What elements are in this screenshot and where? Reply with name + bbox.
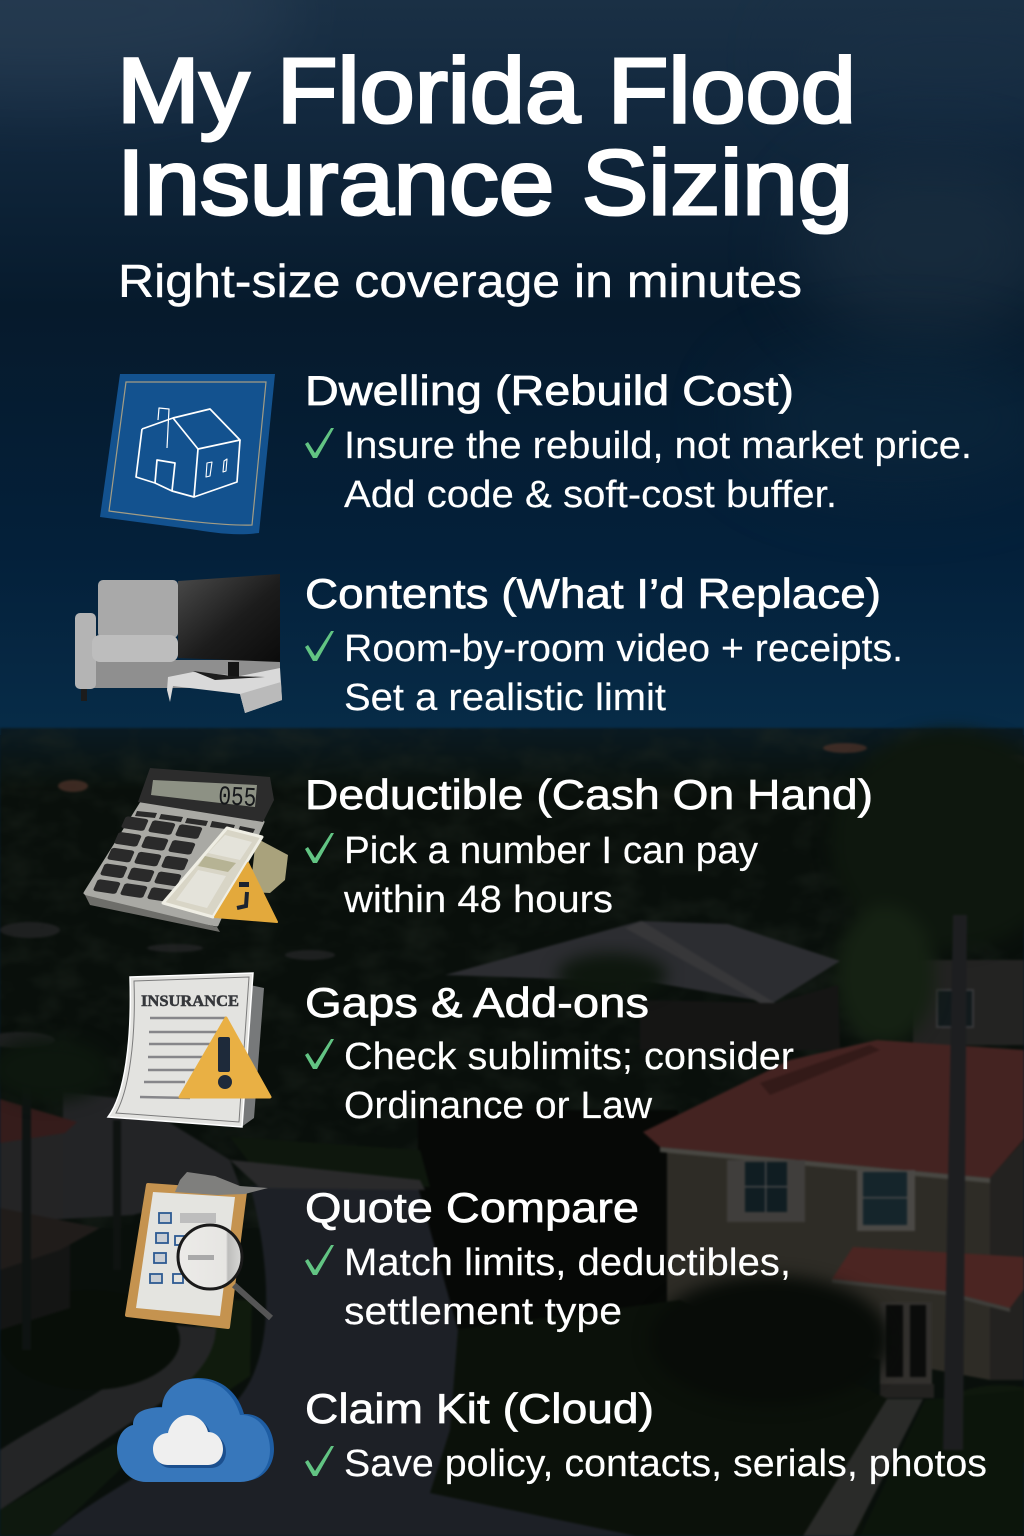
body text: within 48 hours [343,879,613,921]
windows [727,1160,805,1222]
walkway [803,1399,923,1536]
door [880,1302,932,1386]
icon: calculator, cash and warning [85,768,288,932]
body text: Pick a number I can pay [344,830,758,872]
icon: insurance document with warning: INSURANCE [141,993,239,1010]
body text: Insure the rebuild, not market price. [344,425,972,467]
background: stormy sky [0,0,1024,735]
icon: insurance document with warning [108,973,270,1128]
body text: settlement type [344,1291,622,1333]
title: My Florida Flood [117,40,856,142]
heading: Quote Compare [305,1184,639,1231]
grey roof house [640,985,840,1050]
palms [943,915,967,1450]
grey drive [63,1092,240,1219]
icon: check [305,1446,334,1476]
title [117,40,856,234]
icon: check [305,1039,334,1069]
dark hedge [418,1110,678,1340]
main red roof [643,1040,1024,1178]
icon: sofa and TV [75,574,282,713]
left houses [0,1130,63,1222]
panel: deductible [85,768,873,932]
heading: Dwelling (Rebuild Cost) [305,367,794,414]
main house wall [667,1140,1024,1380]
panel: quote compare [127,1172,791,1333]
curb and lawn strip top [230,1137,430,1187]
body text [344,1242,791,1333]
palm fronds [830,730,1024,1045]
icon: check [305,1245,334,1275]
subtitle: Right-size coverage in minutes [118,255,802,307]
icon: check [305,428,334,458]
distant rooftops [58,743,867,792]
body text [344,628,903,719]
body text: Match limits, deductibles, [344,1242,791,1284]
background: darkened aerial neighbourhood photo [0,728,1024,1536]
calculator keys [135,811,255,833]
body text: Add code & soft-cost buffer. [344,474,837,516]
body text: Save policy, contacts, serials, photos [344,1443,987,1485]
body text: Ordinance or Law [344,1085,653,1127]
panel: claim kit [117,1378,987,1485]
panel: gaps and add-ons [108,973,794,1128]
body text [343,830,758,921]
icon: cloud [117,1378,274,1482]
body text: Set a realistic limit [344,677,666,719]
heading: Contents (What I’d Replace) [305,570,881,617]
bush in front of grey roof [557,953,667,997]
title: Insurance Sizing [117,132,853,234]
heading: Claim Kit (Cloud) [305,1385,654,1432]
heading: Deductible (Cash On Hand) [305,771,873,818]
road [50,1186,636,1536]
icon: calculator, cash and warning: 055 [218,783,257,815]
icon: clipboard with magnifier [127,1172,271,1327]
upper right house [913,960,1024,1045]
icon: check [305,833,334,863]
lawn and bushes in front of house [430,1300,890,1536]
panel: contents [75,570,903,719]
heading: Gaps & Add-ons [305,979,649,1026]
icon: check [305,631,334,661]
lawn right [860,1390,1024,1536]
panel: dwelling [100,367,972,534]
body text [344,1036,794,1127]
body text [344,425,972,516]
body text: Check sublimits; consider [344,1036,794,1078]
icon: blueprint house [100,374,275,534]
porch roof [832,1247,1024,1308]
body text: Room-by-room video + receipts. [344,628,903,670]
